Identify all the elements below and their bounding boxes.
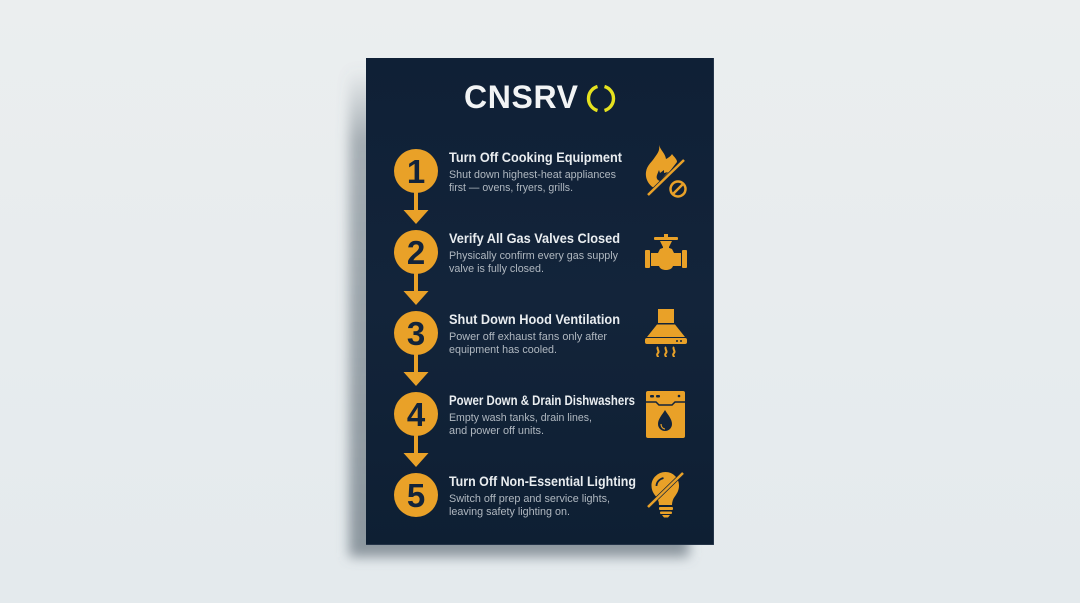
icon: exhaust hood	[645, 309, 687, 357]
step 4 description: and power off units.	[449, 425, 544, 437]
step 1 description	[449, 169, 616, 194]
step 5 description	[449, 493, 610, 518]
step 4 description: Empty wash tanks, drain lines,	[449, 412, 592, 424]
number badge 1	[394, 149, 438, 193]
step 2 description	[449, 250, 618, 275]
number badge 4: 4	[407, 396, 426, 433]
number badge 3	[394, 311, 438, 355]
step 1 heading: Turn Off Cooking Equipment	[449, 150, 622, 165]
step 3 description: equipment has cooled.	[449, 344, 557, 356]
step 3 heading: Shut Down Hood Ventilation	[449, 312, 620, 327]
step 4 heading: Power Down & Drain Dishwashers	[449, 393, 635, 408]
step 1	[394, 145, 686, 224]
step 2 description: valve is fully closed.	[449, 263, 544, 275]
number badge 5	[394, 473, 438, 517]
number badge 4	[394, 392, 438, 436]
step 2 description: Physically confirm every gas supply	[449, 250, 618, 262]
icon: light bulb off	[648, 472, 683, 518]
icon: flame off	[646, 145, 686, 196]
step 3 description: Power off exhaust fans only after	[449, 331, 607, 343]
number badge 2	[394, 230, 438, 274]
number badge 1: 1	[407, 153, 425, 190]
step 5	[394, 472, 683, 518]
step 1 description: Shut down highest-heat appliances	[449, 169, 616, 181]
step 4	[394, 391, 685, 467]
connector arrow 1	[404, 190, 428, 224]
step 3 description	[449, 331, 607, 356]
icon: gas valve	[645, 234, 687, 270]
step 3	[394, 309, 687, 386]
number badge 5: 5	[407, 477, 425, 514]
step 5 description: leaving safety lighting on.	[449, 506, 570, 518]
connector arrow 4	[404, 433, 428, 467]
step 5 description: Switch off prep and service lights,	[449, 493, 610, 505]
step 1 description: first — ovens, fryers, grills.	[449, 182, 573, 194]
logo: CNSRV	[464, 79, 579, 115]
step 2	[394, 230, 687, 305]
poster panel	[366, 58, 714, 545]
step 2 heading: Verify All Gas Valves Closed	[449, 231, 620, 246]
connector arrow 3	[404, 352, 428, 386]
number badge 3: 3	[407, 315, 425, 352]
poster shadow	[349, 68, 689, 557]
number badge 2: 2	[407, 234, 425, 271]
icon: dishwasher	[646, 391, 685, 438]
step 5 heading: Turn Off Non-Essential Lighting	[449, 474, 636, 489]
connector arrow 2	[404, 271, 428, 305]
logo mark	[588, 86, 614, 110]
step 4 description	[449, 412, 592, 437]
